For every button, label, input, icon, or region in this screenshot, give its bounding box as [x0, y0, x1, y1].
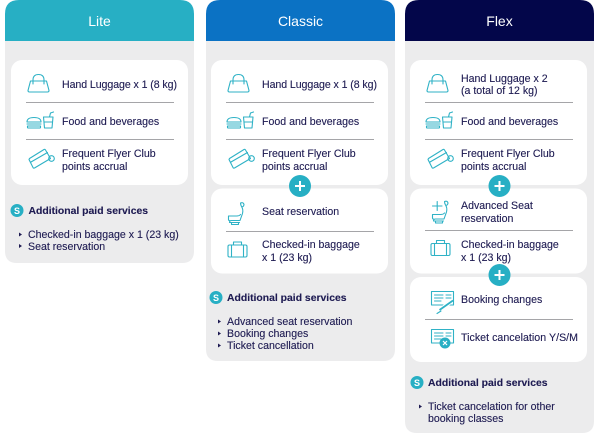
icon: plus: [289, 175, 311, 197]
heading: additional paid services: Additional paid services: [428, 378, 548, 389]
text: points: Frequent Flyer Club: [62, 148, 156, 160]
icon: food: [27, 112, 54, 128]
text: hand luggage: Hand Luggage x 1 (8 kg): [62, 79, 177, 91]
header: Classic: Classic: [278, 13, 323, 29]
icon: plus: [488, 175, 510, 197]
icon: card: [29, 149, 54, 168]
header: Lite: Lite: [88, 13, 111, 29]
text: points: Frequent Flyer Club: [262, 148, 356, 160]
text: checked-in baggage: x 1 (23 kg): [262, 252, 312, 264]
icon: plus: [488, 264, 510, 286]
list bullet: [419, 404, 422, 408]
text: checked-in baggage: Checked-in baggage: [461, 239, 559, 251]
icon: handbag: [228, 74, 249, 92]
icon: paid services: S: [14, 206, 20, 216]
text: checked-in baggage: Checked-in baggage: [262, 239, 360, 251]
text: advanced seat reservation: Advanced Seat: [461, 200, 533, 212]
column background: [405, 30, 594, 433]
icon: paid services: [210, 291, 222, 304]
text: hand luggage: Hand Luggage x 2: [461, 73, 548, 85]
icon: booking document with pen: [432, 292, 454, 314]
list bullets: [19, 232, 22, 248]
card: changes and cancelation: [410, 277, 587, 362]
icon: paid services: S: [414, 378, 420, 388]
card: advanced seat and baggage: [410, 188, 587, 274]
list: paid services: Booking changes: [227, 328, 308, 340]
list: paid services: Seat reservation: [28, 241, 105, 253]
icon: paid services: S: [213, 293, 219, 303]
text: booking changes: Booking changes: [461, 294, 542, 306]
header: Lite: [5, 0, 194, 41]
card: included services: [410, 60, 587, 185]
icon: card: [428, 149, 453, 168]
list: paid services: booking classes: [428, 413, 503, 425]
heading: additional paid services: Additional paid services: [227, 293, 347, 304]
icon: paid services: [10, 204, 24, 217]
card: seat and baggage: [211, 188, 388, 274]
icon: handbag: [28, 74, 49, 92]
text: food: Food and beverages: [62, 116, 159, 128]
text: points: Frequent Flyer Club: [461, 148, 555, 160]
header: Flex: Flex: [486, 13, 513, 29]
column background: [206, 30, 395, 361]
list: paid services: Checked-in baggage x 1 (23 kg): [28, 229, 179, 241]
text: points: points accrual: [461, 161, 526, 173]
list: paid services: Ticket cancellation: [227, 340, 314, 352]
heading: additional paid services: Additional paid services: [28, 206, 148, 217]
icon: ticket with x: [432, 330, 454, 348]
icon: suitcase: [431, 240, 450, 256]
text: food: Food and beverages: [262, 116, 359, 128]
icon: food: [227, 112, 254, 128]
icon: seat with plus: [432, 201, 448, 223]
column background: [5, 30, 194, 263]
text: advanced seat reservation: reservation: [461, 213, 514, 225]
list: paid services: Ticket cancelation for other: [428, 401, 555, 413]
header: Classic: [206, 0, 395, 41]
text: seat reservation: Seat reservation: [262, 206, 339, 218]
card: included services: [11, 60, 188, 185]
text: ticket cancelation: Ticket cancelation Y/S/M: [461, 332, 578, 344]
icon: seat: [228, 203, 244, 224]
icon: card: [229, 149, 254, 168]
column: Lite: [5, 0, 194, 263]
icon: handbag: [427, 74, 448, 92]
card: included services: [211, 60, 388, 185]
column: Flex: [405, 0, 594, 433]
text: checked-in baggage: x 1 (23 kg): [461, 252, 511, 264]
icon: food: [426, 112, 452, 128]
list bullets: [218, 320, 221, 348]
text: points: points accrual: [262, 161, 327, 173]
header: Flex: [405, 0, 594, 41]
icon: suitcase: [228, 242, 247, 257]
list: paid services: Advanced seat reservation: [227, 316, 352, 328]
text: points: points accrual: [62, 161, 127, 173]
icon: paid services: [410, 376, 424, 389]
column: Classic: [206, 0, 395, 361]
text: hand luggage: Hand Luggage x 1 (8 kg): [262, 79, 377, 91]
text: hand luggage: (a total of 12 kg): [461, 85, 538, 97]
text: food: Food and beverages: [461, 116, 558, 128]
